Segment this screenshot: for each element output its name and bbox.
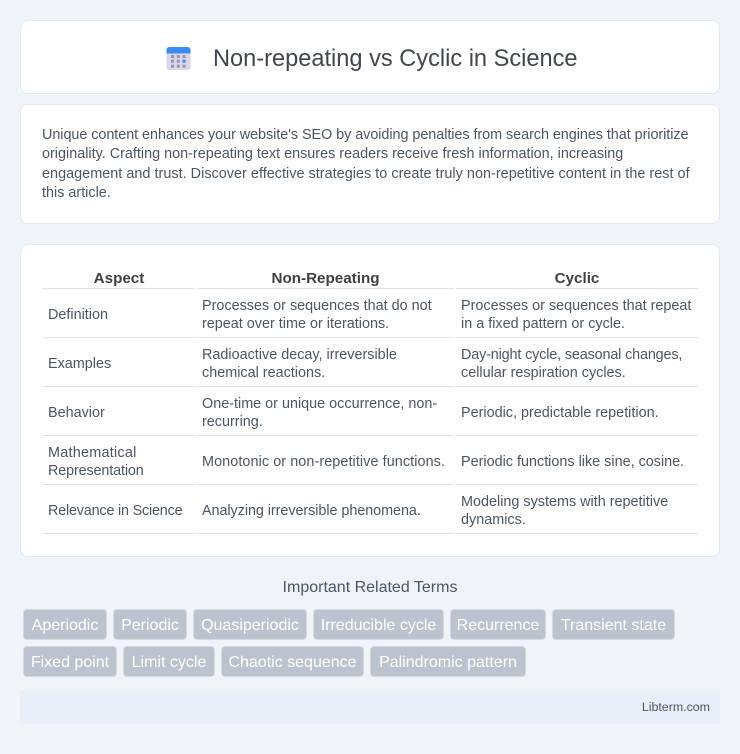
comparison table: Periodic, predictable repetition. [461, 405, 659, 421]
comparison table: repeat over time or iterations. [202, 316, 389, 332]
intro paragraph: engagement and trust. Discover effective strategies to create truly non-repetitive content in the rest of [42, 166, 690, 182]
related term tags: Chaotic sequence [228, 654, 357, 671]
intro paragraph: originality. Crafting non-repeating text ensures readers receive fresh information, increasing [42, 146, 623, 162]
related term tags: Aperiodic [32, 617, 98, 634]
comparison table: in a fixed pattern or cycle. [461, 316, 625, 332]
comparison table: Analyzing irreversible phenomena. [202, 503, 421, 519]
comparison table: Processes or sequences that do not [202, 298, 432, 314]
footer attribution: Libterm.com [642, 700, 710, 714]
comparison table panel [20, 244, 720, 557]
intro text panel [20, 104, 720, 224]
title: Non-repeating vs Cyclic in Science [213, 46, 578, 72]
related term tags: Transient state [561, 617, 666, 634]
related terms heading: Important Related Terms [283, 579, 457, 596]
comparison table: Cyclic [555, 270, 599, 287]
related term tags: Periodic [121, 617, 179, 634]
comparison table: Periodic functions like sine, cosine. [461, 454, 684, 470]
comparison table: Processes or sequences that repeat [461, 298, 691, 314]
intro paragraph [42, 127, 690, 201]
comparison table: Modeling systems with repetitive [461, 494, 668, 510]
comparison table: cellular respiration cycles. [461, 365, 626, 381]
related term tags: Recurrence [457, 617, 539, 634]
related term tags: Limit cycle [132, 654, 206, 671]
intro paragraph: Unique content enhances your website's SEO by avoiding penalties from search engines that prioritize [42, 127, 688, 143]
comparison table: chemical reactions. [202, 365, 325, 381]
comparison table: Definition [48, 307, 108, 323]
comparison table: Aspect [94, 270, 144, 287]
comparison table: Mathematical [48, 445, 137, 461]
comparison table: Representation [48, 463, 144, 479]
comparison table: Non-Repeating [272, 270, 380, 287]
comparison table: Day-night cycle, seasonal changes, [461, 347, 682, 363]
comparison table: Monotonic or non-repetitive functions. [202, 454, 445, 470]
icon: calendar grid [166, 47, 190, 70]
footer bar [20, 690, 720, 724]
comparison table [43, 270, 698, 534]
comparison table: Relevance in Science [48, 503, 182, 519]
comparison table: One-time or unique occurrence, non- [202, 396, 437, 412]
comparison table: recurring. [202, 414, 263, 430]
comparison table: Radioactive decay, irreversible [202, 347, 397, 363]
comparison table: Examples [48, 356, 111, 372]
comparison table: dynamics. [461, 512, 526, 528]
comparison table: Behavior [48, 405, 105, 421]
related term tags: Irreducible cycle [321, 617, 436, 634]
header card [20, 20, 720, 94]
related term tags: Palindromic pattern [379, 654, 517, 671]
related term tags: Fixed point [31, 654, 109, 671]
related term tags: Quasiperiodic [201, 617, 299, 634]
intro paragraph: this article. [42, 185, 111, 201]
